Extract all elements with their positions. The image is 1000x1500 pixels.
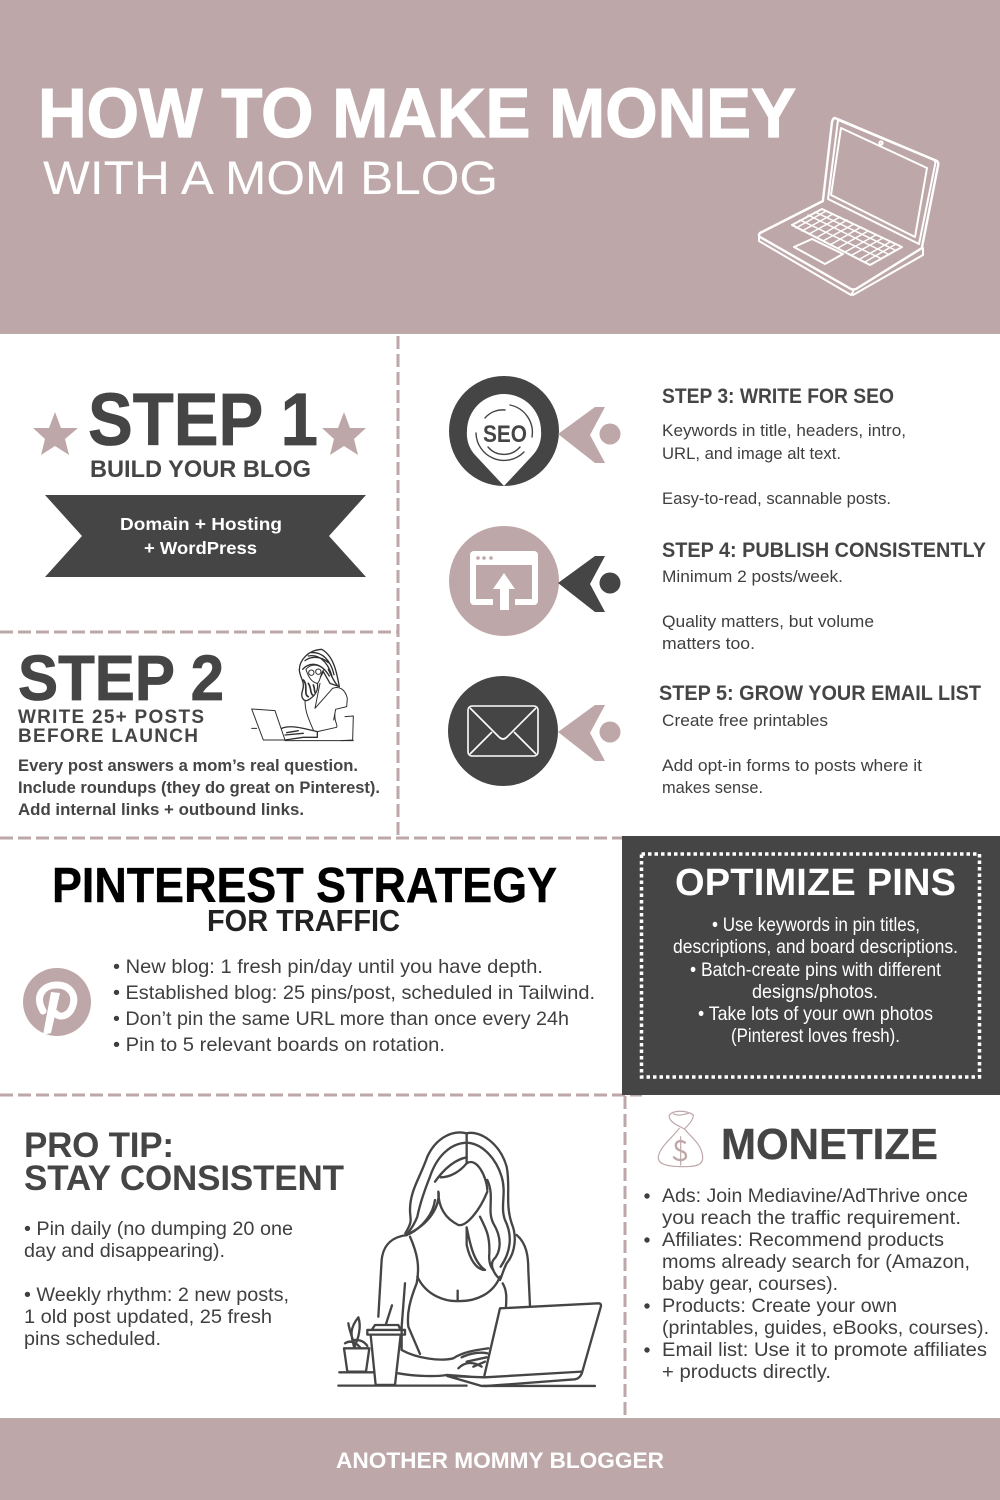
pro tip text: • Pin daily (no dumping 20 one xyxy=(24,1218,293,1240)
panel: step 1 xyxy=(33,378,366,577)
monetize bullets xyxy=(644,1185,989,1383)
optimize text: • Batch-create pins with different xyxy=(690,959,942,981)
dashed dividers xyxy=(0,336,642,1418)
optimize text: descriptions, and board descriptions. xyxy=(673,936,958,958)
panel: step 3 xyxy=(449,376,906,508)
illustration: woman at laptop xyxy=(252,649,353,741)
step 2 subheading: BEFORE LAUNCH xyxy=(18,726,198,747)
icon: left star xyxy=(33,412,78,455)
pinterest bullets xyxy=(113,956,595,1056)
icon: laptop xyxy=(759,118,938,295)
ribbon xyxy=(45,495,366,577)
subtitle: WITH A MOM BLOG xyxy=(43,151,498,204)
pro tip heading: PRO TIP: xyxy=(24,1126,174,1165)
panel: step 5 xyxy=(448,676,981,797)
step 5 text: makes sense. xyxy=(662,779,763,797)
title: HOW TO MAKE MONEY xyxy=(38,74,796,152)
arrow xyxy=(558,705,620,761)
pro tip text: day and disappearing). xyxy=(24,1240,225,1262)
step 2 text xyxy=(18,757,380,819)
pro tip heading: STAY CONSISTENT xyxy=(24,1159,344,1198)
ribbon: + WordPress xyxy=(144,538,257,558)
optimize text: (Pinterest loves fresh). xyxy=(731,1025,900,1047)
step 3 text: Easy-to-read, scannable posts. xyxy=(662,490,891,508)
step 3 text: Keywords in title, headers, intro, xyxy=(662,422,906,440)
panel: pinterest strategy xyxy=(23,859,595,1056)
step 2 subheading xyxy=(18,707,204,747)
step 2 text: Every post answers a mom’s real question. xyxy=(18,757,358,775)
step 2 heading: STEP 2 xyxy=(18,642,224,714)
pinterest bullets: • Pin to 5 relevant boards on rotation. xyxy=(113,1034,445,1056)
optimize text: • Take lots of your own photos xyxy=(698,1003,933,1025)
panel: optimize pins xyxy=(622,836,1000,1095)
monetize bullets: (printables, guides, eBooks, courses). xyxy=(662,1317,989,1339)
footer: ANOTHER MOMMY BLOGGER xyxy=(336,1448,664,1473)
step 5 text xyxy=(662,712,922,797)
footer xyxy=(0,1418,1000,1500)
icon: SEO pin: SEO xyxy=(483,421,527,448)
pinterest bullets: • New blog: 1 fresh pin/day until you have depth. xyxy=(113,956,543,978)
pro tip text: pins scheduled. xyxy=(24,1328,161,1350)
optimize text xyxy=(673,914,958,1047)
monetize bullets: + products directly. xyxy=(662,1361,831,1383)
step 5 heading: STEP 5: GROW YOUR EMAIL LIST xyxy=(659,681,981,705)
icon: pinterest xyxy=(23,968,91,1036)
monetize heading: MONETIZE xyxy=(721,1120,938,1169)
pro tip text xyxy=(24,1218,293,1350)
optimize text: designs/photos. xyxy=(752,981,878,1003)
step 1 heading: STEP 1 xyxy=(88,378,318,461)
panel: header xyxy=(0,0,1000,334)
arrow xyxy=(558,556,620,612)
step 3 text: URL, and image alt text. xyxy=(662,445,841,463)
icon: SEO pin xyxy=(449,376,559,486)
monetize bullets: Email list: Use it to promote affiliates xyxy=(662,1339,987,1361)
pinterest bullets: • Don’t pin the same URL more than once every 24h xyxy=(113,1008,569,1030)
step 3 heading: STEP 3: WRITE FOR SEO xyxy=(662,384,894,408)
monetize bullets: you reach the traffic requirement. xyxy=(662,1207,961,1229)
step 2 text: Add internal links + outbound links. xyxy=(18,801,304,819)
step 5 text: Create free printables xyxy=(662,712,828,730)
step 4 text: Minimum 2 posts/week. xyxy=(662,568,843,586)
step 3 text xyxy=(662,422,906,508)
icon: money bag xyxy=(658,1111,703,1167)
icon: publish xyxy=(449,526,559,636)
step 5 text: Add opt-in forms to posts where it xyxy=(662,757,922,775)
pinterest heading: PINTEREST STRATEGY xyxy=(52,859,557,913)
step 2 subheading: WRITE 25+ POSTS xyxy=(18,707,204,728)
step 4 text xyxy=(662,568,874,653)
step 1 subheading: BUILD YOUR BLOG xyxy=(90,456,311,483)
panel: step 4 xyxy=(449,526,986,653)
panel: step 2 xyxy=(18,642,380,819)
pinterest bullets: • Established blog: 25 pins/post, scheduled in Tailwind. xyxy=(113,982,595,1004)
illustration: woman with laptop and coffee xyxy=(338,1133,601,1386)
monetize bullets: Affiliates: Recommend products xyxy=(662,1229,944,1251)
icon: envelope xyxy=(448,676,558,786)
monetize bullets: moms already search for (Amazon, xyxy=(662,1251,970,1273)
monetize bullets: Ads: Join Mediavine/AdThrive once xyxy=(662,1185,968,1207)
pinterest subheading: FOR TRAFFIC xyxy=(207,903,400,938)
panel: monetize xyxy=(644,1111,989,1383)
ribbon: Domain + Hosting xyxy=(120,514,282,534)
pro tip heading xyxy=(24,1126,344,1198)
monetize bullets: Products: Create your own xyxy=(662,1295,897,1317)
step 2 text: Include roundups (they do great on Pinterest). xyxy=(18,779,380,797)
optimize text: • Use keywords in pin titles, xyxy=(712,914,920,936)
arrow xyxy=(558,407,620,463)
step 4 text: Quality matters, but volume xyxy=(662,613,874,631)
optimize heading: OPTIMIZE PINS xyxy=(675,862,956,904)
pro tip text: • Weekly rhythm: 2 new posts, xyxy=(24,1284,289,1306)
pro tip text: 1 old post updated, 25 fresh xyxy=(24,1306,272,1328)
icon: right star xyxy=(322,412,366,455)
monetize bullets: baby gear, courses). xyxy=(662,1273,838,1295)
panel: pro tip xyxy=(24,1126,601,1386)
step 4 text: matters too. xyxy=(662,635,755,653)
